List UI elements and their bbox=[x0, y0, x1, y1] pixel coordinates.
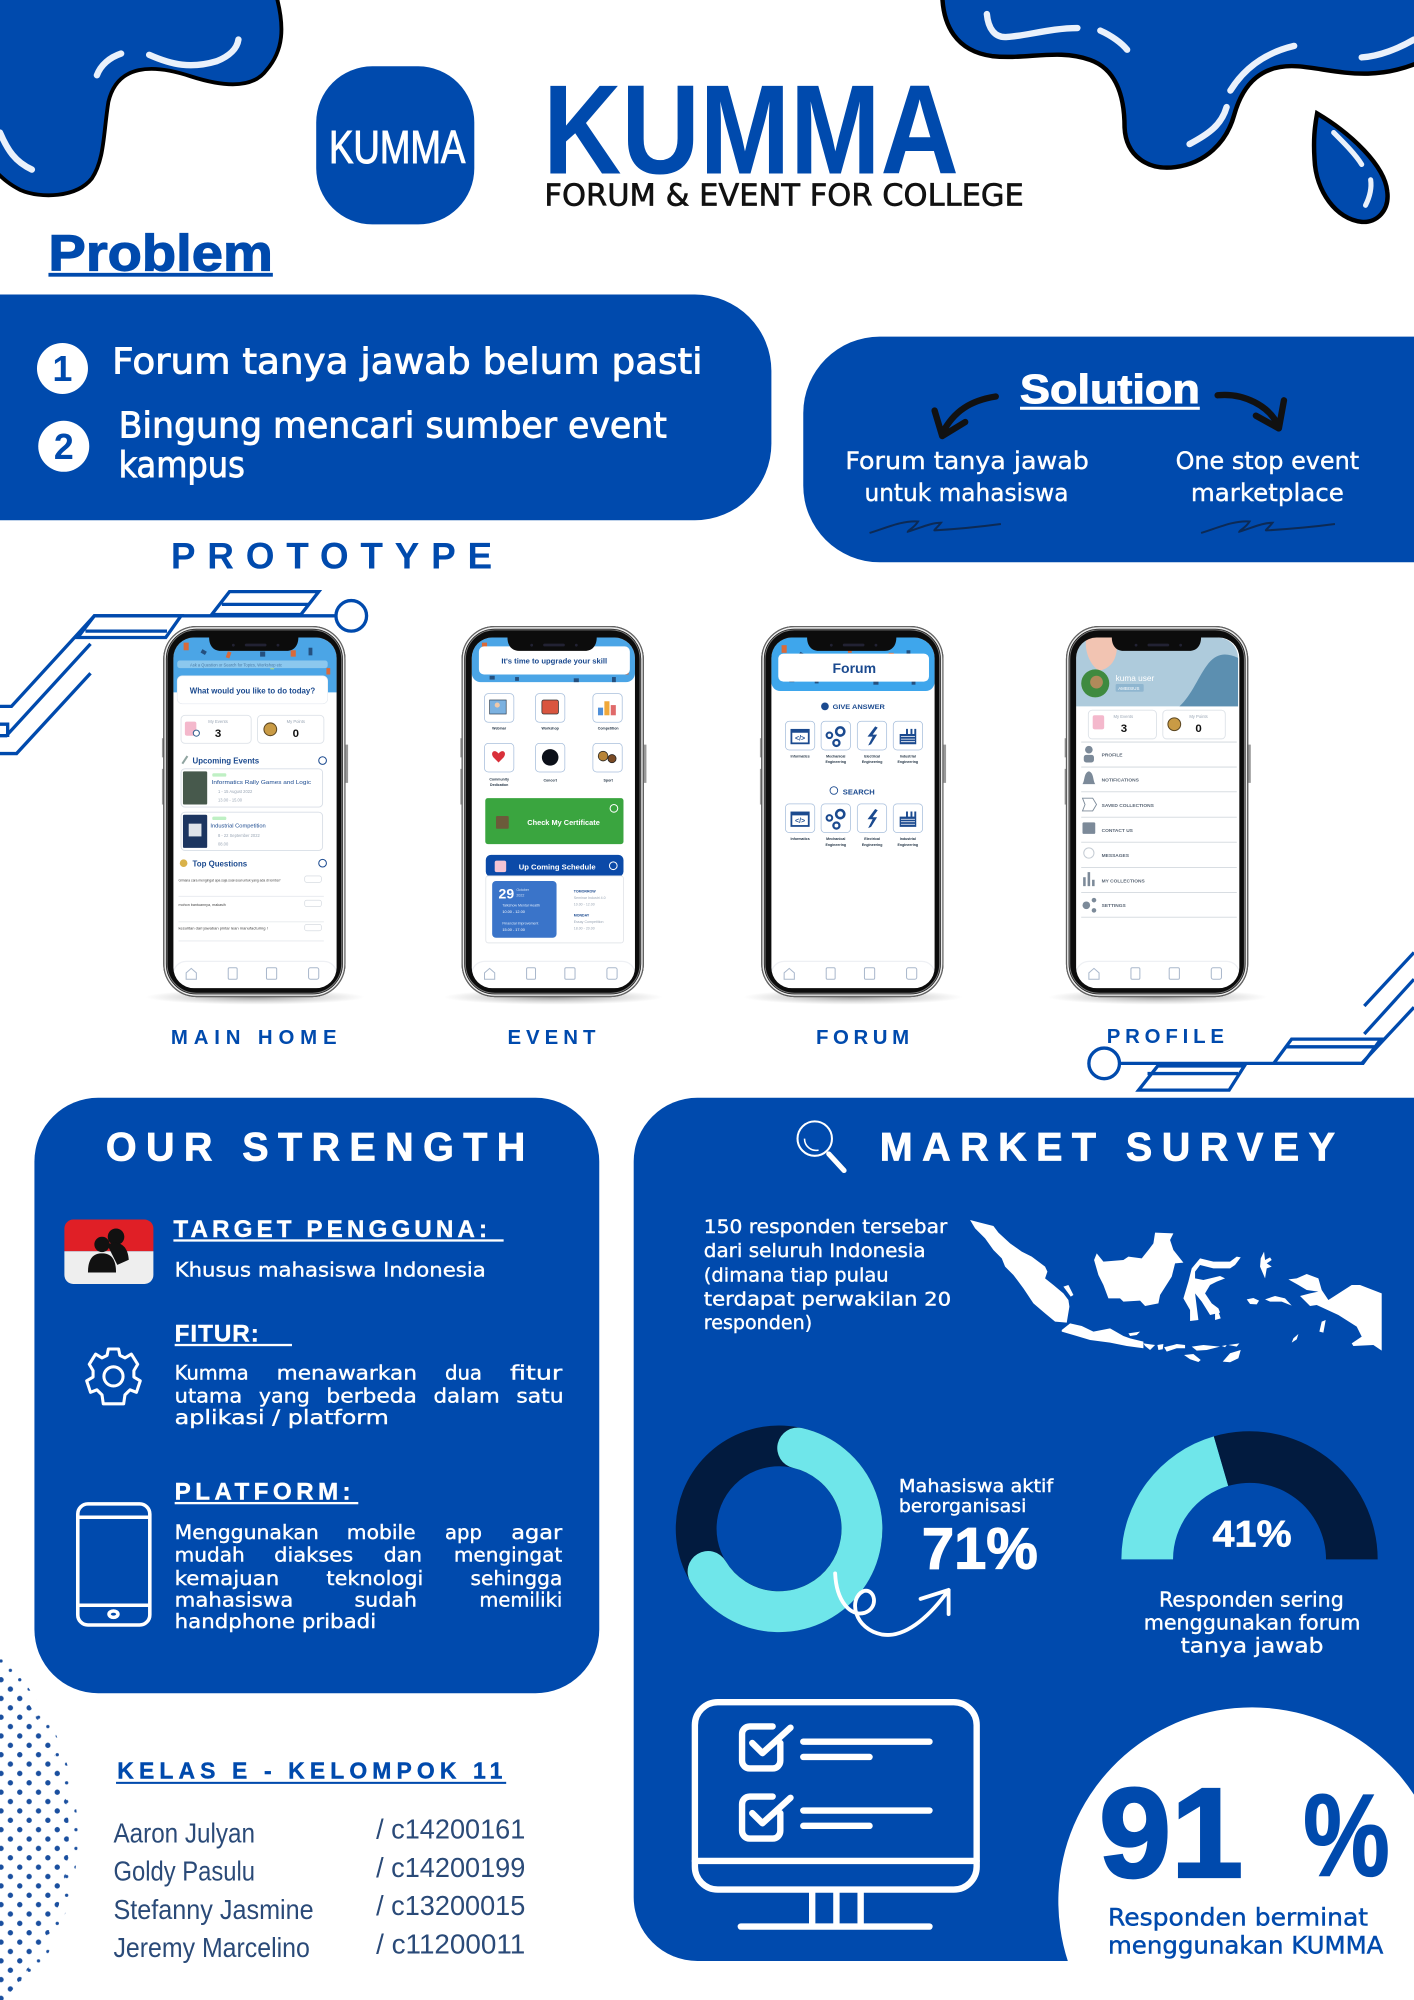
logo badge bbox=[316, 66, 474, 224]
button: certificate: Check My Certificate bbox=[527, 818, 600, 827]
strength: platform: PLATFORM: bbox=[175, 1478, 351, 1505]
top questions: Gimana cara mengingat apa saja soal-soal untuk yang ada di lomba? bbox=[179, 879, 281, 883]
strength: platform: sehingga bbox=[470, 1567, 562, 1590]
panel: our strength bbox=[34, 1098, 599, 1693]
strength: platform: diakses bbox=[274, 1543, 353, 1566]
upcoming schedule: MONDAY bbox=[574, 914, 590, 918]
heading: kelas and kelompok: KELAS E - KELOMPOK 11 bbox=[117, 1758, 503, 1784]
solution heading: Solution bbox=[1020, 366, 1200, 412]
menu list bbox=[1081, 742, 1237, 917]
text: active students: 71% bbox=[922, 1516, 1038, 1581]
arrow: right bbox=[1218, 395, 1284, 428]
menu list: MY COLLECTIONS bbox=[1102, 878, 1145, 884]
team names bbox=[113, 1817, 314, 1963]
solution option 2: marketplace bbox=[1191, 479, 1344, 507]
panel: solution bbox=[803, 337, 1414, 562]
survey sample text bbox=[704, 1217, 951, 1334]
upcoming schedule: 2022 bbox=[516, 893, 524, 897]
search: SEARCH bbox=[843, 788, 875, 796]
strength: platform: app bbox=[445, 1521, 482, 1544]
search: Engineering bbox=[898, 843, 918, 847]
strength: fitur: satu bbox=[516, 1385, 564, 1408]
stat cards: My Points bbox=[1189, 714, 1208, 719]
text: active students: berorganisasi bbox=[899, 1496, 1026, 1517]
icon: monitor with checklist bbox=[695, 1702, 977, 1927]
phone: event: Community bbox=[489, 777, 509, 781]
callout: 91 percent: menggunakan KUMMA bbox=[1108, 1931, 1384, 1959]
map: indonesia bbox=[970, 1220, 1382, 1362]
strength: platform: Menggunakan bbox=[175, 1521, 319, 1544]
phone: profile: AMBISIUS bbox=[1118, 686, 1140, 691]
text: forum usage bbox=[1144, 1588, 1360, 1657]
survey sample text: responden) bbox=[704, 1313, 812, 1334]
give answer: Engineering bbox=[825, 760, 846, 764]
strength: fitur: Kumma bbox=[175, 1362, 249, 1385]
blob: top-right paint drip bbox=[942, 0, 1414, 168]
survey sample text: 150 responden tersebar bbox=[704, 1217, 948, 1238]
give answer: Informatics bbox=[790, 754, 810, 758]
team names: Stefanny Jasmine bbox=[113, 1894, 314, 1925]
upcoming schedule: 18.00 - 20.00 bbox=[574, 926, 595, 930]
text: active students: Mahasiswa aktif bbox=[899, 1476, 1054, 1497]
phone: main home bbox=[145, 626, 365, 1005]
survey sample text: (dimana tiap pulau bbox=[704, 1265, 889, 1286]
callout: 91 percent: % bbox=[1303, 1770, 1390, 1901]
give answer: Electrical bbox=[864, 754, 880, 758]
label: main home: MAIN HOME bbox=[171, 1027, 337, 1049]
menu list: PROFILE bbox=[1102, 753, 1123, 759]
search: Mechanical bbox=[826, 837, 845, 841]
problem item 2: 2 bbox=[54, 427, 74, 467]
strength: fitur bbox=[175, 1320, 564, 1429]
stat cards bbox=[181, 715, 324, 743]
survey sample text: terdapat perwakilan 20 bbox=[704, 1290, 951, 1311]
phone: main home: What would you like to do today? bbox=[190, 687, 315, 696]
stat cards: 0 bbox=[293, 728, 299, 740]
menu list: NOTIFICATIONS bbox=[1102, 778, 1140, 784]
give answer: GIVE ANSWER bbox=[833, 704, 885, 711]
strength: platform bbox=[175, 1478, 563, 1633]
arrow: curl to 71 percent bbox=[835, 1573, 949, 1635]
stat cards: 3 bbox=[1121, 723, 1127, 735]
strength: fitur: FITUR: bbox=[175, 1320, 259, 1347]
title: KUMMA wordmark: KUMMA bbox=[543, 59, 959, 201]
icon: magnifier bbox=[798, 1121, 844, 1170]
problem item 2: Bingung mencari sumber event bbox=[119, 405, 667, 446]
strength: fitur: dua bbox=[445, 1362, 482, 1385]
panel: market survey bbox=[634, 1098, 1414, 1962]
strength: fitur: yang bbox=[259, 1385, 310, 1408]
upcoming events bbox=[181, 756, 326, 850]
heading: market survey: MARKET SURVEY bbox=[880, 1125, 1335, 1169]
strength: platform: memiliki bbox=[479, 1589, 562, 1612]
give answer: Engineering bbox=[862, 760, 882, 764]
problem item 1 bbox=[37, 342, 703, 394]
stat cards bbox=[1088, 710, 1225, 739]
menu list: SETTINGS bbox=[1102, 903, 1127, 909]
phone: forum: Forum bbox=[832, 660, 876, 676]
solution option 1 bbox=[845, 447, 1089, 533]
strength: platform: kemajuan bbox=[175, 1567, 279, 1590]
strength: fitur: berbeda bbox=[326, 1385, 417, 1408]
team names: Jeremy Marcelino bbox=[113, 1932, 310, 1963]
upcoming schedule: Financial Improvement bbox=[502, 921, 538, 925]
menu list: SAVED COLLECTIONS bbox=[1102, 803, 1155, 809]
problem item 2: kampus bbox=[119, 445, 245, 486]
icon: gear bbox=[87, 1349, 140, 1404]
phone: event: Sport bbox=[604, 779, 614, 783]
strength: platform: mahasiswa bbox=[175, 1589, 293, 1612]
text: active students bbox=[899, 1476, 1054, 1581]
icon: blue drop bbox=[1314, 113, 1388, 222]
label: profile: PROFILE bbox=[1107, 1026, 1224, 1048]
problem item 2 bbox=[38, 405, 667, 486]
strength: platform: handphone pribadi bbox=[175, 1610, 376, 1633]
give answer bbox=[785, 703, 923, 764]
team names: Aaron Julyan bbox=[113, 1817, 255, 1848]
solution option 1: untuk mahasiswa bbox=[864, 479, 1068, 507]
heading: our strength: OUR STRENGTH bbox=[106, 1125, 525, 1169]
upcoming events: 8 - 22 September 2022 bbox=[218, 833, 260, 838]
problem item 1: 1 bbox=[53, 349, 72, 389]
team student ids: / c14200199 bbox=[376, 1852, 525, 1883]
top questions: kesulitan dari jawaban pintar lean manufacturing ! bbox=[179, 926, 268, 930]
text: forum usage: tanya jawab bbox=[1181, 1633, 1323, 1657]
team names: Goldy Pasulu bbox=[113, 1856, 255, 1887]
strength: fitur: dalam bbox=[434, 1385, 500, 1408]
search: Electrical bbox=[864, 837, 880, 841]
upcoming events: 13.00 - 15.00 bbox=[218, 797, 243, 802]
strength: target pengguna: TARGET PENGGUNA: bbox=[173, 1216, 487, 1243]
solution option 2 bbox=[1176, 447, 1359, 533]
phone: profile bbox=[1048, 626, 1267, 1005]
strength: platform: mudah bbox=[175, 1543, 245, 1566]
phone: event: It's time to upgrade your skill bbox=[501, 657, 607, 666]
upcoming schedule: Essay Competition bbox=[574, 920, 603, 924]
phone: event: Concert bbox=[543, 779, 558, 783]
phone: event bbox=[444, 626, 663, 1005]
top questions: mohon bantuannya, makasih bbox=[179, 903, 226, 907]
upcoming schedule: 10.00 - 12.00 bbox=[574, 902, 595, 906]
label: event: EVENT bbox=[507, 1027, 596, 1049]
upcoming events: Industrial Competition bbox=[210, 823, 266, 829]
menu list: MESSAGES bbox=[1102, 853, 1130, 859]
strength: target pengguna: Khusus mahasiswa Indonesia bbox=[175, 1258, 486, 1281]
search: Engineering bbox=[862, 843, 882, 847]
survey sample text: dari seluruh Indonesia bbox=[704, 1241, 926, 1262]
give answer: Mechanical bbox=[826, 754, 845, 758]
stat cards: My Events bbox=[1114, 714, 1133, 719]
give answer: Industrial bbox=[900, 754, 916, 758]
top questions bbox=[179, 859, 326, 941]
blob: top-left paint drip bbox=[0, 0, 281, 195]
heading: prototype: PROTOTYPE bbox=[171, 536, 492, 577]
search: Engineering bbox=[825, 843, 846, 847]
upcoming schedule: Up Coming Schedule bbox=[519, 863, 596, 872]
label: forum: FORUM bbox=[816, 1027, 909, 1049]
stat cards: 0 bbox=[1195, 723, 1202, 735]
strength: fitur: menawarkan bbox=[277, 1362, 417, 1385]
strength: fitur: fitur bbox=[510, 1362, 562, 1385]
button: certificate bbox=[485, 798, 623, 844]
search: Industrial bbox=[900, 837, 916, 841]
strength: platform: dan bbox=[384, 1543, 422, 1566]
phone: event: Competition bbox=[598, 726, 619, 730]
upcoming schedule: TOMORROW bbox=[574, 890, 596, 894]
callout: 91 percent bbox=[1058, 1707, 1414, 1962]
strength: target pengguna bbox=[173, 1216, 504, 1281]
strength: fitur: aplikasi / platform bbox=[175, 1406, 389, 1429]
text: forum usage: Responden sering bbox=[1159, 1588, 1344, 1612]
logo badge: KUMMA bbox=[329, 121, 466, 173]
gauge chart: 41 percent bbox=[1121, 1431, 1378, 1559]
strength: platform: teknologi bbox=[326, 1567, 423, 1590]
upcoming events: Informatics Rally Games and Logic bbox=[212, 780, 311, 786]
upcoming events: 08.00 bbox=[218, 841, 229, 846]
phone: forum bbox=[743, 626, 963, 1005]
category icons bbox=[485, 694, 622, 772]
arrow: left bbox=[935, 397, 996, 436]
phone: profile: kuma user bbox=[1116, 674, 1154, 683]
team student ids: / c14200161 bbox=[376, 1814, 525, 1845]
upcoming schedule: 29 bbox=[499, 885, 514, 901]
strength: platform: mengingat bbox=[454, 1543, 563, 1566]
team student ids: / c13200015 bbox=[376, 1890, 525, 1921]
search bbox=[785, 787, 923, 847]
solution option 2: One stop event bbox=[1176, 447, 1359, 475]
phone: event: Dedication bbox=[490, 783, 508, 787]
solution option 1: Forum tanya jawab bbox=[845, 447, 1089, 475]
callout: 91 percent: Responden berminat bbox=[1108, 1903, 1368, 1931]
team student ids bbox=[376, 1814, 525, 1959]
phone: event: Webinar bbox=[492, 726, 507, 730]
stat cards: 3 bbox=[215, 728, 221, 740]
upcoming events: Upcoming Events bbox=[193, 757, 260, 766]
upcoming schedule: 10.00 - 12.00 bbox=[502, 910, 525, 914]
heading: Problem: Problem bbox=[48, 224, 273, 281]
icon: flag with people bbox=[64, 1220, 153, 1284]
panel: problem bbox=[0, 295, 771, 520]
strength: platform: agar bbox=[511, 1521, 562, 1544]
strength: platform: mobile bbox=[347, 1521, 416, 1544]
search: Informatics bbox=[790, 837, 810, 841]
upcoming schedule: 15.00 - 17.00 bbox=[502, 928, 525, 932]
strength: fitur: utama bbox=[175, 1385, 242, 1408]
menu list: CONTACT US bbox=[1102, 828, 1134, 834]
upcoming events: 1 - 15 August 2022 bbox=[218, 789, 253, 794]
phone: event: Workshop bbox=[541, 726, 560, 730]
upcoming schedule: October bbox=[516, 888, 530, 892]
problem item 1: Forum tanya jawab belum pasti bbox=[112, 342, 703, 383]
text: forum usage: menggunakan forum bbox=[1144, 1610, 1360, 1634]
tagline: FORUM & EVENT FOR COLLEGE bbox=[544, 178, 1024, 213]
donut chart: 71 percent bbox=[696, 1446, 862, 1612]
phone: main home: Ask a Question or Search for Topics, Workshop etc bbox=[190, 662, 282, 667]
stat cards: My Points bbox=[287, 719, 305, 724]
strength: platform: sudah bbox=[354, 1589, 417, 1612]
icon: phone outline bbox=[78, 1504, 150, 1625]
upcoming schedule: Seminar Industri 4.0 bbox=[574, 896, 606, 900]
upcoming schedule bbox=[486, 855, 623, 943]
upcoming schedule: Talkshow Mental Health bbox=[502, 904, 540, 908]
gauge chart: 41 percent: 41% bbox=[1213, 1514, 1292, 1555]
callout: 91 percent: 91 bbox=[1099, 1763, 1243, 1905]
give answer: Engineering bbox=[898, 760, 918, 764]
team student ids: / c11200011 bbox=[376, 1928, 525, 1959]
top questions: Top Questions bbox=[193, 859, 248, 868]
stat cards: My Events bbox=[208, 719, 228, 724]
